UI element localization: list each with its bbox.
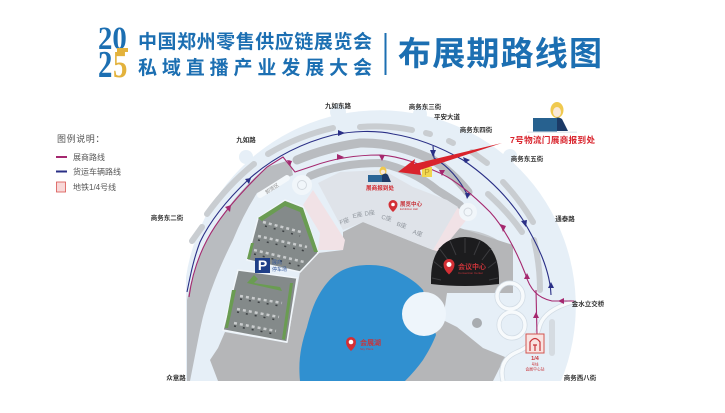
legend: 图例说明：: [57, 133, 105, 144]
metro station: 号线: [532, 362, 539, 366]
hall labels: A座: [412, 228, 424, 239]
exhibitor desk icon: [366, 166, 394, 192]
logo: 2025: 5: [113, 44, 127, 86]
hall labels: D座: [364, 208, 375, 218]
legend: freight route: 货运车辆路线: [73, 166, 121, 176]
white dome: [402, 292, 446, 336]
parking sign: P: [258, 257, 267, 273]
parking lot upper: [247, 200, 318, 272]
exhibitor route arrows: [225, 154, 564, 318]
grey road dividers: [192, 126, 552, 353]
exhibition centre label: [388, 200, 423, 212]
hall labels: [339, 208, 424, 239]
legend: exhibitor route: 展商路线: [73, 152, 105, 162]
exhibitor desk icon: 展商报到处: [366, 184, 394, 192]
legend: [56, 133, 121, 192]
hall labels: F座: [339, 216, 350, 226]
road labels: 商务西八街: [564, 373, 597, 382]
lake label: Sky Plaza: [360, 347, 374, 351]
metro station: 会展中心站: [526, 366, 545, 372]
freight route: [187, 131, 551, 295]
loading strip: 卸货区: [264, 182, 280, 196]
road labels: 商务东五街: [511, 154, 544, 163]
road labels: 商务东二街: [151, 213, 184, 222]
hall labels: B座: [396, 220, 408, 230]
callout: exhibitor check-in: 7号物流门展商报到处: [510, 134, 595, 145]
parking sign: 停车场: [272, 266, 287, 273]
road labels: 金水立交桥: [572, 299, 605, 308]
road labels: 商务东四街: [460, 125, 493, 134]
hall labels: E座: [352, 210, 363, 220]
title: event name: 中国郑州零售供应链展览会: [138, 30, 372, 53]
parking lot lower: [223, 270, 297, 342]
reception staff icon: [527, 102, 577, 133]
convention centre: 会议中心: [458, 262, 486, 271]
interchange loops: [497, 283, 572, 381]
road labels: 九如路: [236, 135, 256, 144]
road labels: 九如东路: [325, 101, 352, 110]
roundabout: [292, 175, 477, 221]
metro station: [526, 334, 545, 372]
road labels: 商务东三街: [409, 102, 442, 111]
logo: 2025: 2: [98, 44, 112, 86]
metro station: 1/4: [531, 356, 540, 362]
exhibitor route: [189, 155, 574, 335]
exhibition building: [318, 170, 458, 250]
parking marker: [422, 167, 432, 177]
logo: 2025: 20: [98, 20, 127, 56]
parking sign: 展商: [272, 259, 282, 266]
map base: site circle: [186, 104, 576, 381]
road labels: [151, 101, 605, 382]
grey inner road bands: [187, 143, 505, 381]
road labels: 通泰路: [555, 214, 575, 223]
exhibition centre label: Exhibition Hall: [400, 207, 418, 211]
title: event name: 私域直播产业发展大会: [138, 56, 372, 79]
map: [186, 104, 576, 381]
loading strip: [260, 178, 287, 196]
lake label: [346, 337, 381, 351]
divider: [384, 33, 386, 75]
parking marker: P: [424, 168, 430, 177]
parking sign: [255, 257, 287, 273]
lake: [299, 265, 436, 381]
road labels: 众意路: [166, 373, 186, 382]
lake label: 会展湖: [360, 338, 381, 347]
heading: route map: 布展期路线图: [398, 35, 602, 72]
big red arrow: [398, 143, 502, 175]
exhibition centre label: 展览中心: [400, 200, 423, 208]
logo: 2025: [98, 20, 128, 86]
hall labels: C座: [380, 213, 393, 223]
legend: metro line: 地铁1/4号线: [73, 182, 116, 192]
title: event name: [138, 30, 372, 79]
convention centre: [431, 237, 499, 286]
road labels: 平安大道: [434, 112, 460, 121]
grey plaza: [210, 222, 513, 381]
forecourt disc: [472, 318, 482, 328]
pale pink apron: [303, 190, 468, 252]
freight route arrows: [245, 130, 554, 288]
convention centre: Convention Center: [458, 271, 483, 275]
